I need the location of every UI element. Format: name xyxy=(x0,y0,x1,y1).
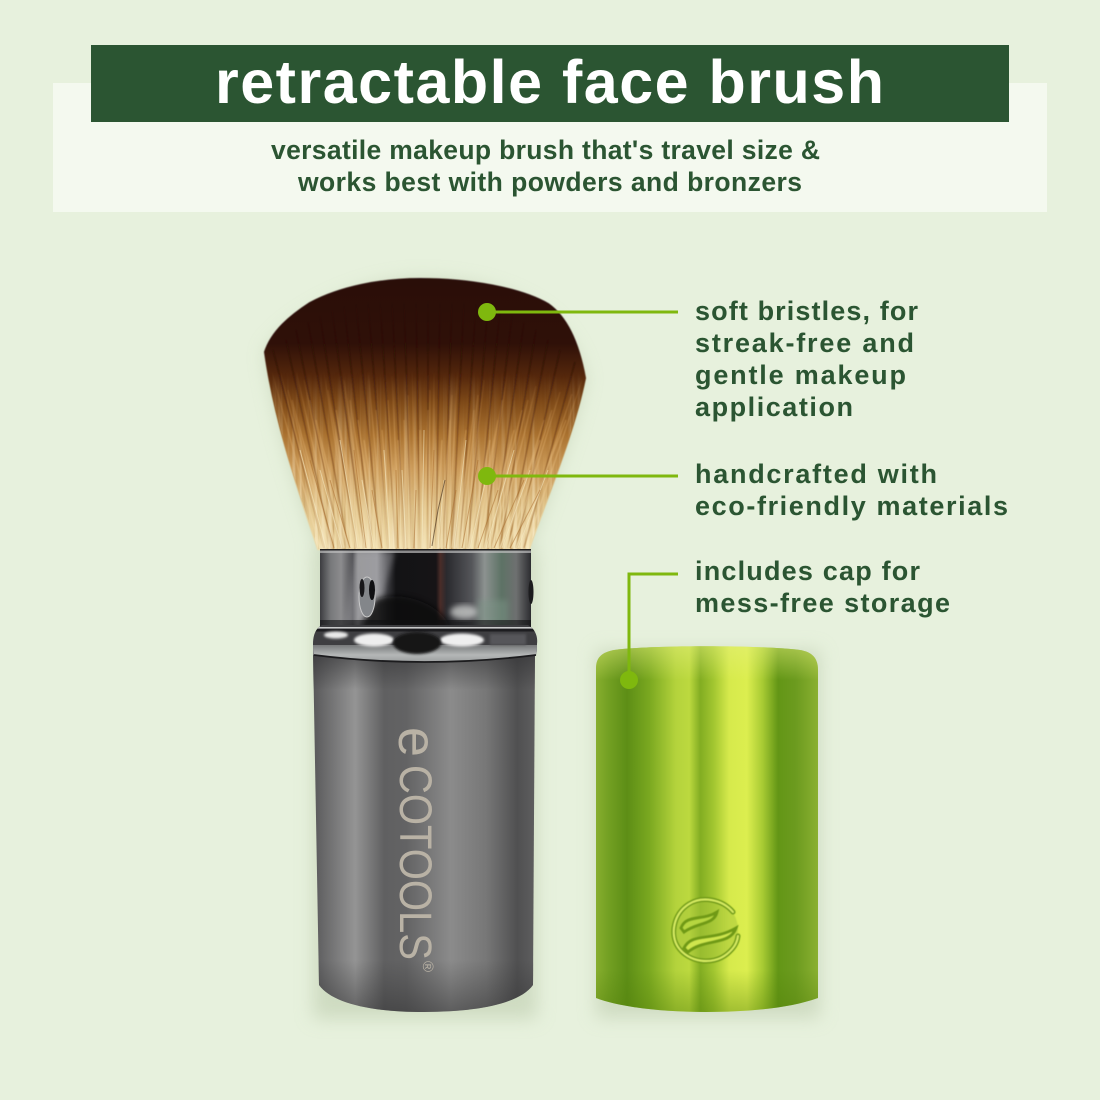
brush handle xyxy=(313,650,535,1012)
callout text xyxy=(695,556,950,618)
callout text: mess-free storage xyxy=(695,588,950,618)
callout marker xyxy=(478,467,678,485)
subtitle text: works best with powders and bronzers xyxy=(297,167,802,197)
callout text xyxy=(695,459,1008,521)
callout: eco-friendly xyxy=(478,459,1008,521)
brush chrome ring xyxy=(313,625,538,663)
callout marker xyxy=(620,572,678,689)
callout text: handcrafted with xyxy=(695,459,937,489)
callout text: includes cap for xyxy=(695,556,920,586)
icon: cap leaf logo xyxy=(674,898,738,962)
subtitle panel xyxy=(53,83,1047,212)
callout marker xyxy=(478,303,678,321)
handle logo wordmark: ® xyxy=(419,961,436,972)
cap xyxy=(596,646,818,1012)
callout: soft bristles xyxy=(478,296,918,422)
handle logo wordmark xyxy=(387,727,447,972)
callout text xyxy=(695,296,918,422)
brush ferrule xyxy=(320,549,534,629)
product shadows xyxy=(265,279,820,1019)
callout text: gentle makeup xyxy=(695,360,906,390)
brush bristles xyxy=(255,270,595,555)
subtitle text: versatile makeup brush that's travel size & xyxy=(271,135,820,165)
handle logo wordmark: COTOOLS xyxy=(390,765,441,960)
callout text: soft bristles, for xyxy=(695,296,918,326)
callout text: application xyxy=(695,392,853,422)
callout text: streak-free and xyxy=(695,328,914,358)
title: retractable face brush xyxy=(215,48,884,116)
callout: cap xyxy=(620,556,950,689)
subtitle text xyxy=(271,135,820,197)
handle logo wordmark: e xyxy=(387,727,447,757)
title banner xyxy=(91,45,1009,122)
brush xyxy=(255,270,595,1012)
callout text: eco-friendly materials xyxy=(695,491,1008,521)
